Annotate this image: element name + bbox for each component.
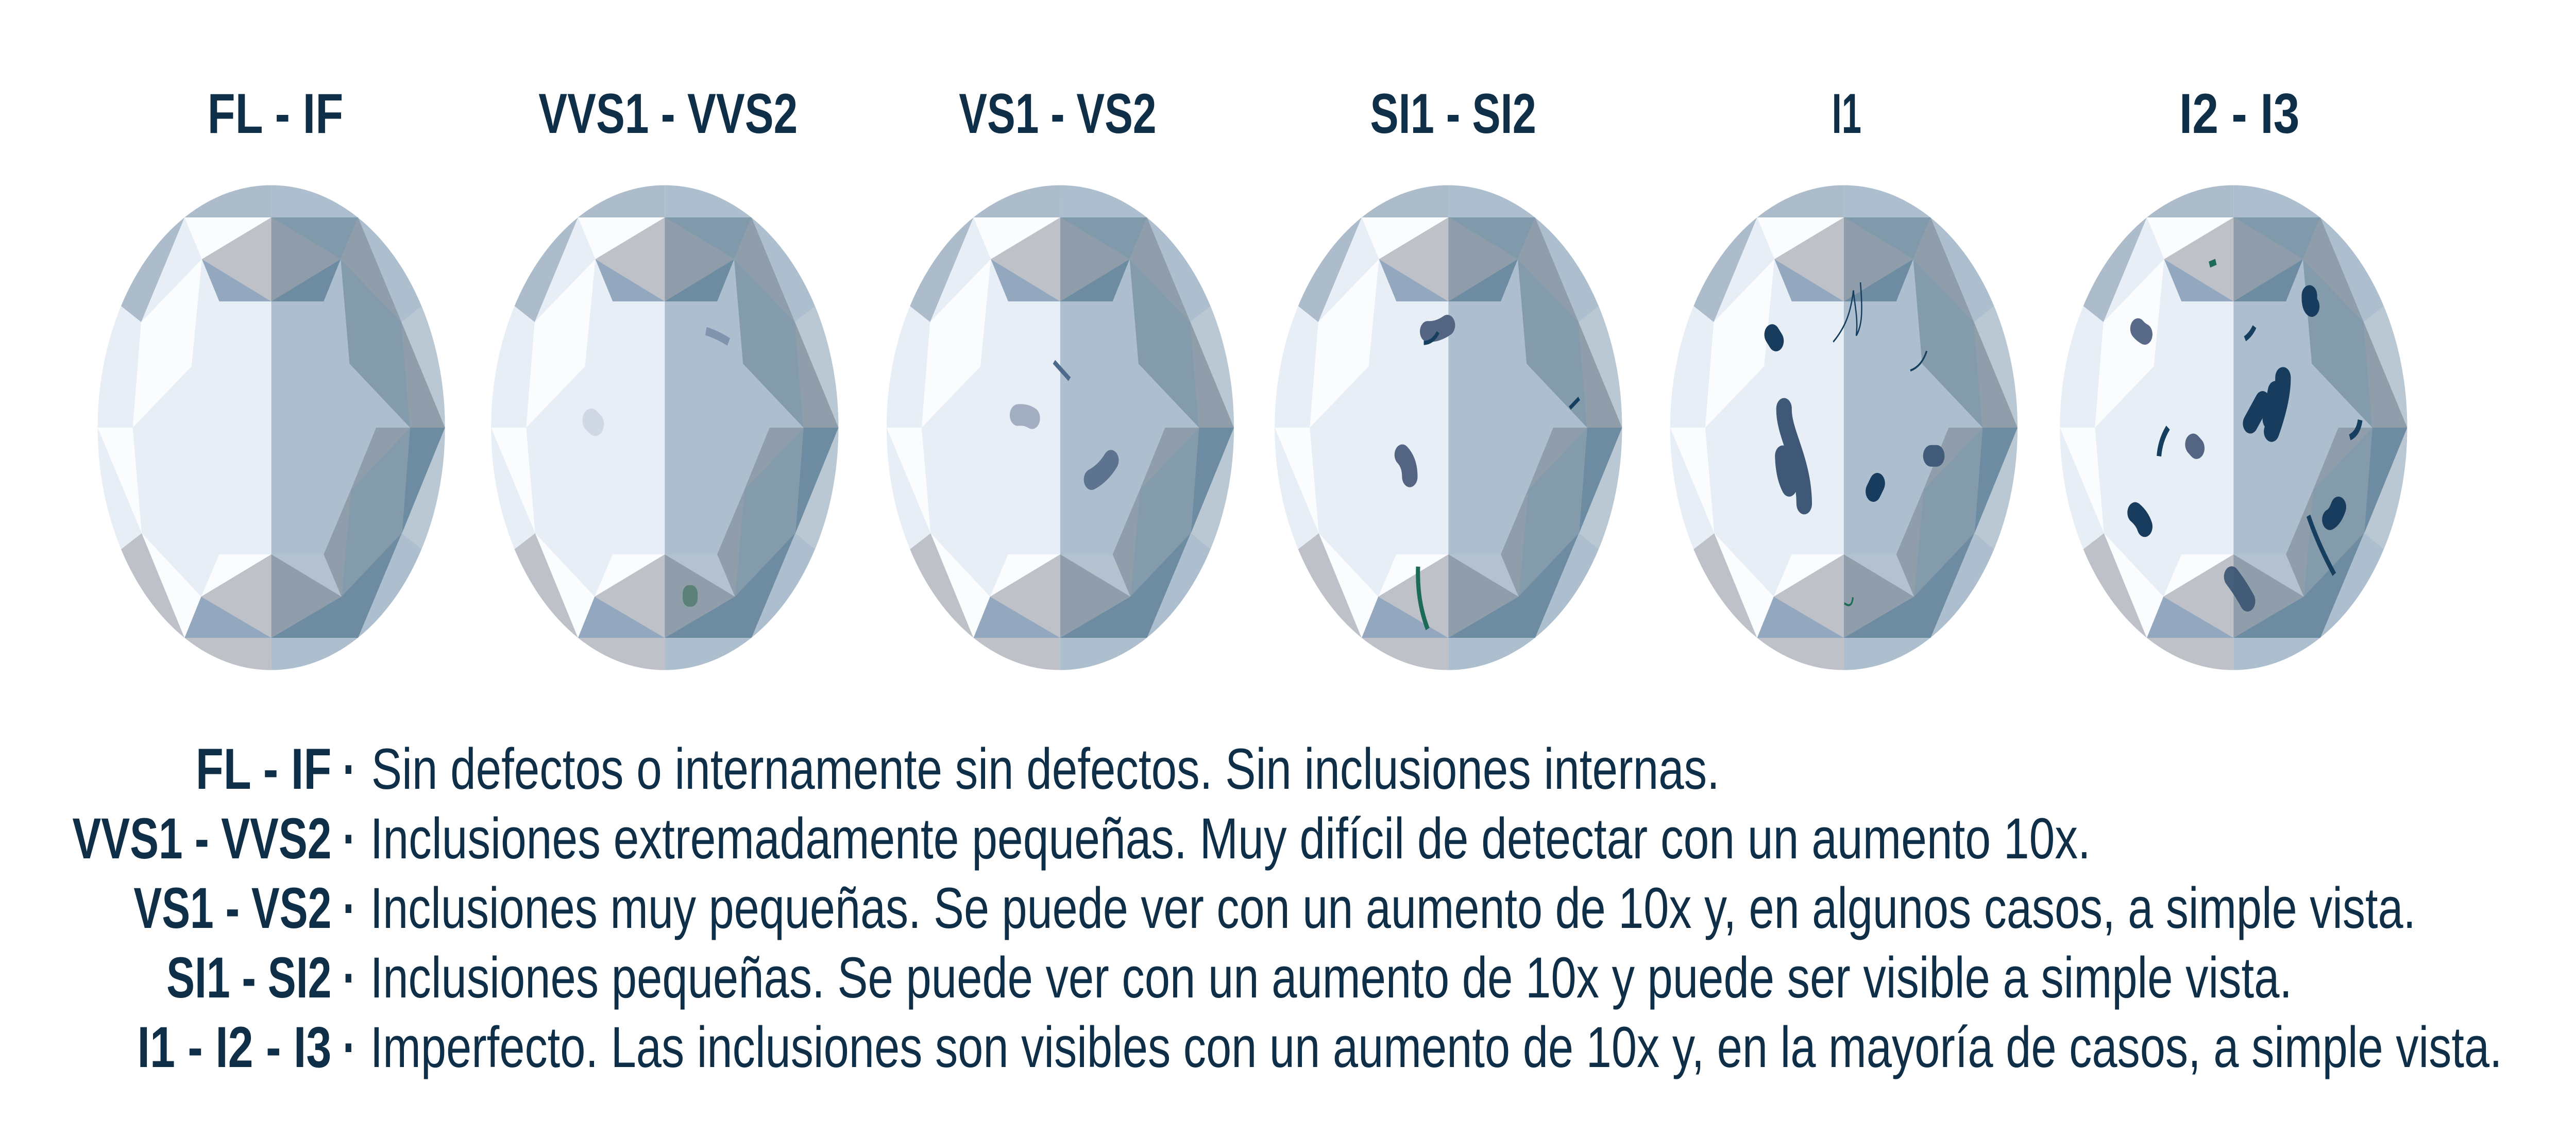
legend row: I1 - I2 - I3: · [343,1015,357,1079]
legend row: I1 - I2 - I3: Imperfecto. Las inclusiones son visibles con un aumento de 10x y, en la mayoría de casos, a simple vista. [370,1015,2502,1079]
legend row: VS1 - VS2: Inclusiones muy pequeñas. Se puede ver con un aumento de 10x y, en algunos casos, a simple vista. [370,876,2416,940]
title: FL - IF: FL - IF [208,82,343,145]
diamond: VVS1 - VVS2 [491,185,838,670]
legend row: FL - IF: Sin defectos o internamente sin defectos. Sin inclusiones internas. [371,737,1720,801]
diamond: VS1 - VS2 [887,185,1234,670]
legend row: SI1 - SI2: SI1 - SI2 [166,945,331,1010]
title: I1: I1 [1832,82,1861,145]
title: SI1 - SI2: SI1 - SI2 [1370,82,1536,145]
title: VVS1 - VVS2: VVS1 - VVS2 [538,82,798,145]
legend row: VS1 - VS2: · [343,876,357,940]
legend row: SI1 - SI2: · [343,945,357,1010]
legend row: I1 - I2 - I3: I1 - I2 - I3 [138,1015,331,1079]
diamond: FL - IF [97,185,445,670]
diamond: I1 [1670,185,2018,670]
legend row: SI1 - SI2: Inclusiones pequeñas. Se puede ver con un aumento de 10x y puede ser visible a simple vista. [370,945,2292,1010]
legend row: VVS1 - VVS2: Inclusiones extremadamente pequeñas. Muy difícil de detectar con un aumento 10x. [370,806,2091,871]
legend row: VS1 - VS2: VS1 - VS2 [133,876,331,940]
diamond: SI1 - SI2 [1275,185,1622,670]
title: I2 - I3: I2 - I3 [2179,82,2299,145]
legend row: VVS1 - VVS2: VVS1 - VVS2 [72,806,331,871]
title: VS1 - VS2: VS1 - VS2 [959,82,1157,145]
legend row: VVS1 - VVS2: · [343,806,357,871]
legend row: FL - IF: FL - IF [196,737,331,801]
diamond: I2 - I3 [2060,185,2407,670]
legend row: FL - IF: · [343,737,357,801]
